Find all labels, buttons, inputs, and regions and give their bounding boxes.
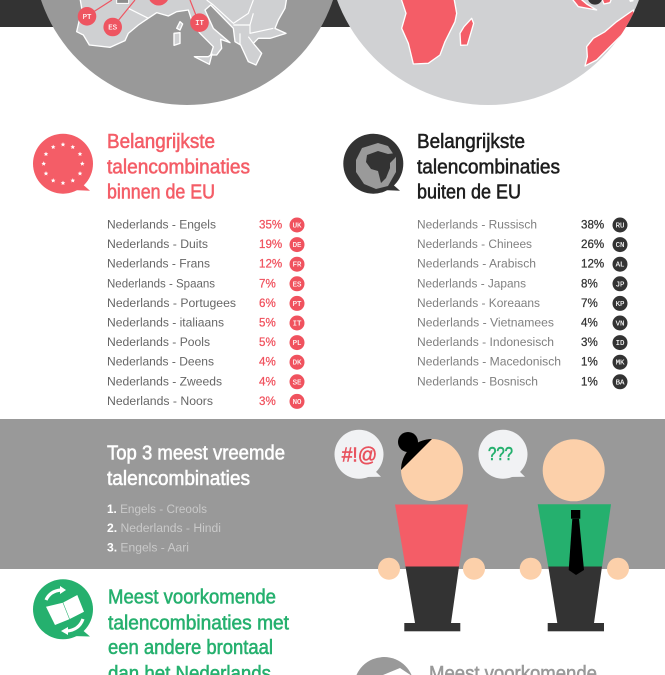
table: non-EU combinations: 1% [581,356,598,369]
table: EU combinations: NO [293,399,302,407]
table: non-EU combinations: Nederlands - Bosnisch [417,374,538,388]
heading: buiten de EU: Belangrijkste [417,131,525,153]
pin: IT: IT [195,20,204,28]
dark top band [0,0,665,27]
table: EU combinations [107,218,304,409]
table: non-EU combinations: AL [616,262,624,270]
table: non-EU combinations: 7% [581,297,598,310]
heading: buiten de EU [417,131,560,204]
panel: grey band [0,419,665,569]
pin lines [87,0,199,27]
table: EU combinations: 7% [259,277,276,290]
table: EU combinations: 4% [259,356,276,369]
table: EU combinations: SE [293,379,302,387]
icon: grey speech bubble [354,657,414,675]
heading: buiten de EU: buiten de EU [417,182,521,204]
table: non-EU combinations: 8% [581,277,598,290]
pin: PT [78,7,96,26]
speech bubble: ??? [478,430,528,479]
table: non-EU combinations: 1% [581,375,598,388]
table: EU combinations: Nederlands - Duits [107,237,208,251]
heading: andere brontaal: talencombinaties met [108,612,289,634]
heading: top 3 [107,442,285,490]
heading: andere brontaal: Meest voorkomende [108,586,276,608]
table: non-EU combinations: JP [616,281,625,289]
table: EU combinations: Nederlands - Spaans [107,276,215,290]
icon: book speech bubble [33,579,93,639]
table: EU combinations: ES [293,281,302,289]
list: top 3 [107,502,221,554]
table: EU combinations: Nederlands - Deens [107,355,214,369]
table: non-EU combinations: Nederlands - Arabisch [417,257,536,271]
icon: globe speech bubble [343,134,403,194]
table: EU combinations: IT [293,320,302,328]
table: non-EU combinations: KP [616,301,625,309]
table: non-EU combinations: BA [616,379,625,387]
table: EU combinations: Nederlands - italiaans [107,316,224,330]
table: non-EU combinations: Nederlands - Chinees [417,237,532,251]
table: non-EU combinations: VN [616,320,624,328]
table: non-EU combinations: 38% [581,218,604,232]
table: EU combinations: 35% [259,218,282,232]
table: EU combinations: 6% [259,297,276,310]
table: non-EU combinations: Nederlands - Russisch [417,218,537,232]
heading: andere brontaal: een andere brontaal [108,637,273,659]
figure: woman [378,432,485,631]
table: EU combinations: 3% [259,395,276,408]
table: non-EU combinations [417,218,628,389]
list: top 3: 2. Nederlands - Hindi [107,521,221,535]
table: EU combinations: Nederlands - Frans [107,257,210,271]
table: non-EU combinations: Nederlands - Macedonisch [417,355,561,369]
table: non-EU combinations: CN [616,242,624,250]
heading: binnen de EU [107,131,250,204]
table: non-EU combinations: MK [616,360,625,368]
table: EU combinations: PT [293,301,302,309]
pin: ES: ES [108,24,118,32]
pin: top [148,0,169,6]
table: EU combinations: Nederlands - Portugees [107,296,236,310]
table: EU combinations: PL [293,340,301,348]
heading: binnen de EU: talencombinaties [107,156,250,178]
pin: IT [190,13,209,32]
table: non-EU combinations: 4% [581,316,598,330]
table: EU combinations: DK [293,360,302,368]
table: EU combinations: Nederlands - Noors [107,394,213,408]
figure: man [520,439,629,631]
table: non-EU combinations: Nederlands - Koreaans [417,296,540,310]
table: EU combinations: 5% [259,316,276,330]
table: non-EU combinations: RU [616,222,624,230]
table: non-EU combinations: Nederlands - Japans [417,276,526,290]
heading: top 3: talencombinaties [107,468,250,490]
icon: EU speech bubble [33,134,93,194]
table: non-EU combinations: Nederlands - Vietnamees [417,316,554,330]
map: Europe [33,0,341,105]
table: EU combinations: DE [293,242,302,250]
table: EU combinations: Nederlands - Zweeds [107,374,222,388]
heading: andere brontaal [108,586,289,675]
list: top 3: 3. Engels - Aari [107,540,189,554]
table: EU combinations: UK [293,222,302,230]
table: EU combinations: 4% [259,375,276,388]
table: non-EU combinations: 26% [581,238,604,251]
table: EU combinations: FR [293,262,302,270]
heading: binnen de EU: binnen de EU [107,182,215,204]
map: world [327,0,649,105]
heading: top 3: Top 3 meest vreemde [107,442,285,464]
table: EU combinations: 19% [259,238,282,251]
speech bubble: #!@ [334,430,384,479]
pin: ES [103,18,122,36]
table: non-EU combinations: 3% [581,336,598,349]
table: EU combinations: 12% [259,258,282,271]
table: non-EU combinations: 12% [581,258,604,271]
table: non-EU combinations: ID [616,340,625,348]
pin: PT: PT [83,14,92,22]
heading: binnen de EU: Belangrijkste [107,131,215,153]
table: EU combinations: 5% [259,336,276,349]
speech bubble: #!@: #!@ [342,444,377,466]
table: EU combinations: Nederlands - Engels [107,218,216,232]
table: EU combinations: Nederlands - Pools [107,335,210,349]
table: non-EU combinations: Nederlands - Indonesisch [417,335,554,349]
heading: buiten de EU: talencombinaties [417,156,560,178]
speech bubble: ???: ??? [488,444,513,464]
list: top 3: 1. Engels - Creools [107,502,207,516]
